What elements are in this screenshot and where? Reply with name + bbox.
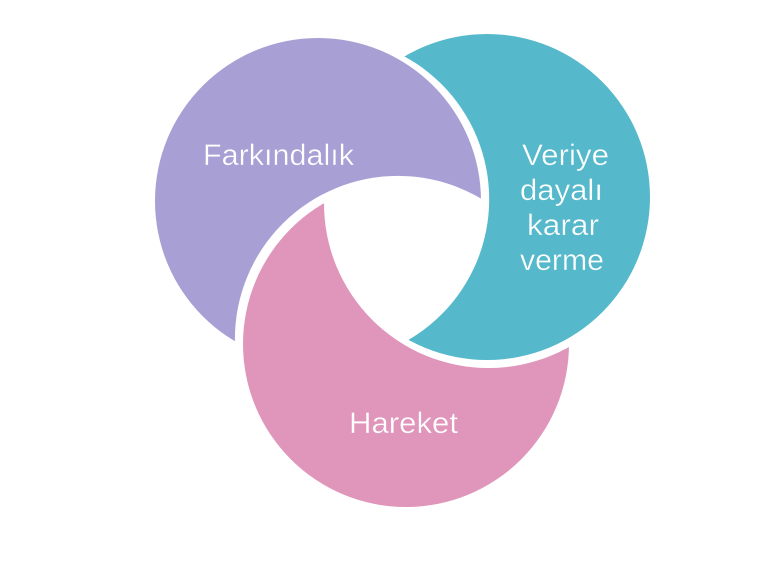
infographic: three interlocking circles — [155, 34, 650, 507]
panel: purple crescent Farkındalık — [155, 38, 481, 364]
label: Hareket: Hareket — [349, 407, 458, 440]
label: Veriye dayalı karar verme: Veriye — [522, 139, 609, 172]
shape: pink circle — [243, 181, 569, 507]
label: Veriye dayalı karar verme: dayalı — [520, 174, 603, 207]
panel: pink crescent Hareket — [243, 181, 569, 507]
shape: purple circle — [155, 38, 481, 364]
panel: teal crescent Veriye dayalı karar verme — [404, 34, 650, 360]
label: Veriye dayalı karar verme: verme — [520, 244, 604, 277]
label: Veriye dayalı karar verme: karar — [527, 209, 599, 242]
label: Farkındalık: Farkındalık — [203, 139, 354, 172]
label: Veriye dayalı karar verme — [520, 139, 609, 277]
shape: teal circle — [404, 34, 650, 360]
